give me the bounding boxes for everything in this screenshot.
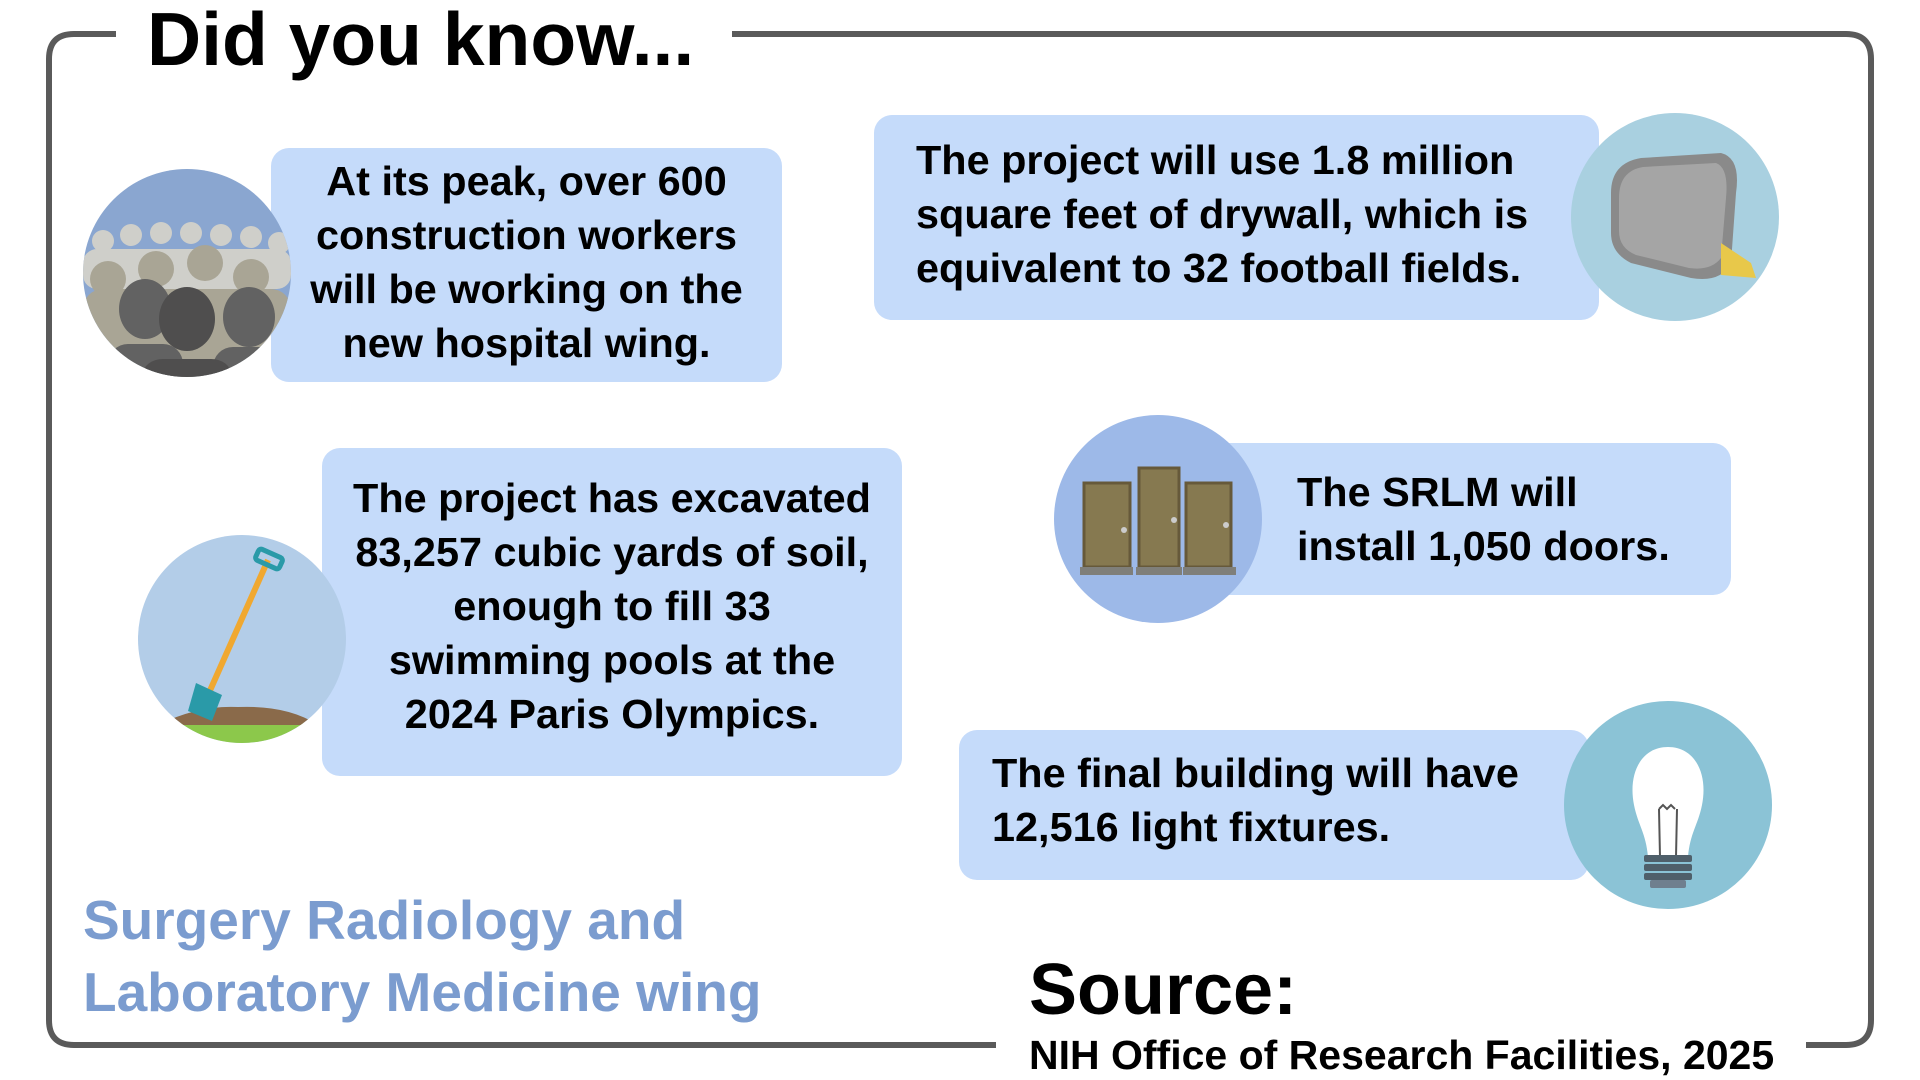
text: drywall: The project will use 1.8 million <box>916 137 1514 183</box>
text: workers: construction workers <box>316 212 737 258</box>
text: excavation: 2024 Paris Olympics. <box>405 691 819 737</box>
footer: wing name: Surgery Radiology and <box>83 889 685 951</box>
icon: shovel <box>138 535 346 743</box>
text: doors: install 1,050 doors. <box>1297 523 1670 569</box>
text: lights <box>992 750 1519 850</box>
icon: light bulb <box>1564 701 1772 909</box>
text: excavation <box>353 475 871 737</box>
text: excavation: enough to fill 33 <box>453 583 771 629</box>
text: lights: 12,516 light fixtures. <box>992 804 1390 850</box>
panel: workers <box>83 148 782 382</box>
footer: wing name <box>83 889 761 1023</box>
source: Source: <box>1029 950 1297 1030</box>
icon: crowd <box>83 169 291 377</box>
source <box>1029 950 1774 1078</box>
text: lights: The final building will have <box>992 750 1519 796</box>
text: workers: At its peak, over 600 <box>326 158 727 204</box>
icon: tape measure <box>1571 113 1779 321</box>
panel: doors <box>1054 415 1731 623</box>
text: drywall: equivalent to 32 football fields. <box>916 245 1521 291</box>
panel: excavation <box>138 448 902 776</box>
text: excavation: The project has excavated <box>353 475 871 521</box>
panel: drywall <box>874 113 1779 321</box>
text: workers: will be working on the <box>310 266 743 312</box>
text: workers: new hospital wing. <box>342 320 711 366</box>
text: drywall <box>916 137 1528 291</box>
text: excavation: swimming pools at the <box>389 637 835 683</box>
text: doors: The SRLM will <box>1297 469 1578 515</box>
panel: lights <box>959 701 1772 909</box>
footer: wing name: Laboratory Medicine wing <box>83 961 761 1023</box>
source: NIH Office of Research Facilities, 2025 <box>1029 1032 1774 1078</box>
icon: doors <box>1054 415 1262 623</box>
text: drywall: square feet of drywall, which is <box>916 191 1528 237</box>
text: doors <box>1297 469 1670 569</box>
text: workers <box>310 158 743 366</box>
text: excavation: 83,257 cubic yards of soil, <box>355 529 869 575</box>
